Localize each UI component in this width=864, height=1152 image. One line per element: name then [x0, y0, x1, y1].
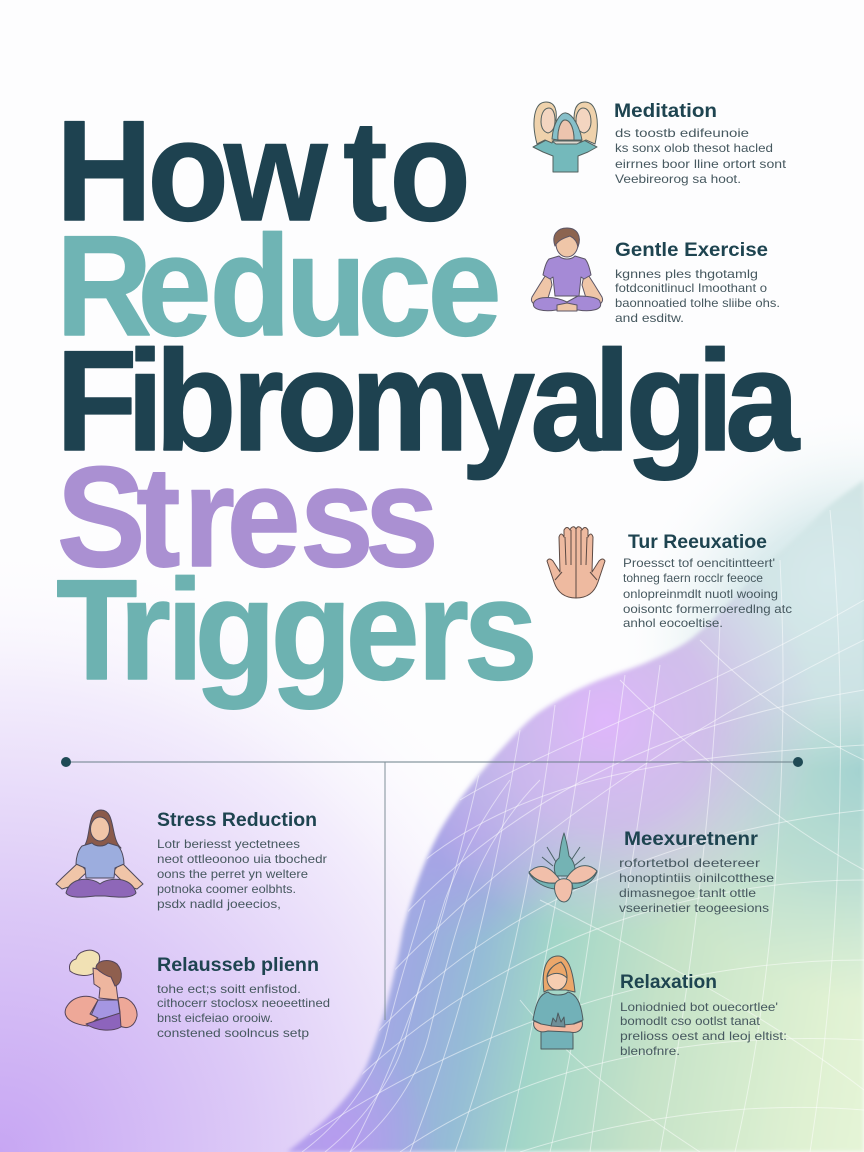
item: Relaxation	[533, 956, 787, 1058]
description: fotdconitlinucl Imoothant o	[615, 281, 767, 295]
description	[157, 837, 327, 911]
description: ks sonx olob thesot hacled	[615, 141, 773, 155]
description: psdx nadld joeecios,	[157, 897, 281, 911]
item: Stress Reduction	[56, 810, 327, 911]
heading: Relaxation	[620, 972, 717, 993]
description	[619, 856, 774, 915]
heading: Meexuretnenr	[624, 829, 759, 850]
description: cithocerr stoclosx neoeettined	[157, 996, 330, 1010]
description: baonnoatied tolhe sliibe ohs.	[615, 296, 780, 310]
description: ooisontc formerroeredlng atc	[623, 602, 792, 616]
description: Veebireorog sa hoot.	[615, 172, 741, 186]
description: Lotr beriesst yectetnees	[157, 837, 300, 851]
divider	[61, 757, 803, 1020]
description: tohneg faern rocclr feeoce	[623, 571, 763, 585]
description	[615, 126, 787, 186]
icon: person with cloud and pain spots	[65, 950, 137, 1030]
description: rofortetbol deetereer	[619, 856, 760, 870]
background	[0, 450, 864, 1152]
description: potnoka coomer eolbhts.	[157, 882, 296, 896]
icon: meditation group	[533, 102, 597, 172]
icon: open hands	[547, 527, 605, 598]
icon: woman holding plant	[533, 956, 583, 1049]
description: ds toostb edifeunoie	[615, 126, 749, 140]
heading: Meditation	[614, 101, 717, 122]
icon: cross-legged person in purple	[531, 228, 603, 311]
description: vseerinetier teogeesions	[619, 901, 769, 915]
icon: flower with petals	[529, 833, 597, 902]
item: Meexuretnenr	[529, 829, 774, 915]
heading: Stress Reduction	[157, 810, 317, 831]
item: Tur Reeuxatioe	[547, 527, 792, 630]
description: eirrnes boor lline ortort sont	[615, 157, 787, 171]
description: and esditw.	[615, 311, 684, 325]
description: constened soolncus setp	[157, 1026, 309, 1040]
description: blenofnre.	[620, 1044, 680, 1058]
description: dimasnegoe tanlt ottle	[619, 886, 756, 900]
title line: How to: How to	[56, 92, 471, 251]
icon: seated woman meditating	[56, 810, 143, 897]
heading: Tur Reeuxatioe	[628, 532, 767, 553]
title line: Triggers: Triggers	[56, 551, 538, 710]
description: honoptintiis oinilcotthese	[619, 871, 774, 885]
description: tohe ect;s soitt enfistod.	[157, 982, 301, 996]
description	[615, 267, 780, 325]
heading: Gentle Exercise	[615, 240, 768, 261]
description: bnst eicfeiao orooiw.	[157, 1011, 273, 1025]
description: Proessct tof oencitintteert'	[623, 556, 775, 570]
description	[623, 556, 792, 630]
description	[620, 1000, 787, 1058]
title line: Stress: Stress	[57, 438, 439, 597]
description: oons the perret yn weltere	[157, 867, 308, 881]
description: onlopreinmdlt nuotl wooing	[623, 587, 778, 601]
title line: Reduce: Reduce	[56, 207, 502, 366]
description: Loniodnied bot ouecortlee'	[620, 1000, 778, 1014]
description: neot ottleoonoo uia tbochedr	[157, 852, 327, 866]
heading: Relausseb plienn	[157, 955, 319, 976]
description: kgnnes ples thgotamlg	[615, 267, 758, 281]
description: bomodlt cso ootlst tanat	[620, 1014, 761, 1028]
description	[157, 982, 330, 1040]
item: Meditation	[533, 101, 787, 186]
item: Gentle Exercise	[531, 228, 780, 325]
title line: Fibromyalgia: Fibromyalgia	[56, 322, 800, 481]
item: Relausseb plienn	[65, 950, 330, 1040]
description: anhol eocoeltise.	[623, 616, 723, 630]
title	[56, 92, 800, 710]
description: prelioss oest and leoj eltist:	[620, 1029, 787, 1043]
